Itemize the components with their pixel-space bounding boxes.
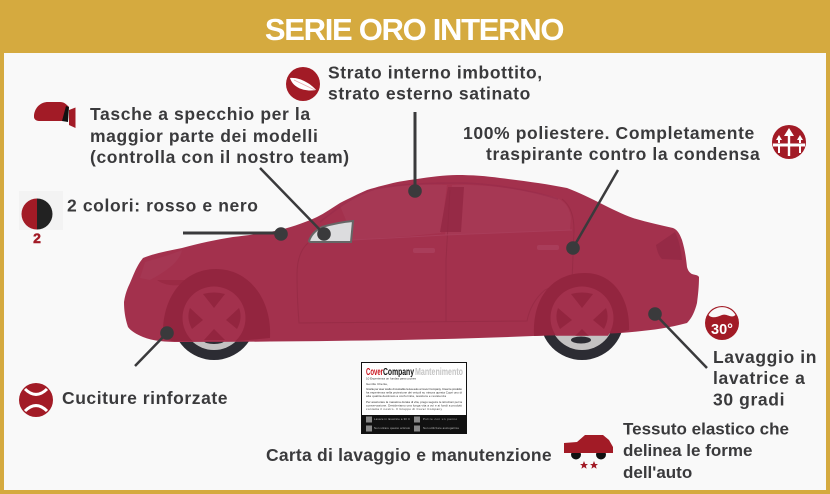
icon: two colours: 2 [33,230,41,246]
text: elastic fabric: dell'auto [623,463,692,482]
text: mirror pockets: Tasche a specchio per la [90,104,311,124]
door handles [413,248,435,253]
text: stitching: Cuciture rinforzate [62,388,228,408]
tail light [656,232,682,260]
text: machine wash: 30 gradi [713,390,785,410]
text: elastic fabric: delinea le forme [623,441,752,460]
windows [340,185,571,240]
icon: elastic car [564,435,613,469]
car body [124,175,699,342]
card heading: Mantenimento [415,367,463,378]
pointer: stitching [135,326,174,366]
card care text: Lavare in lavatrice a 30 C [374,417,410,421]
card heading: Company [383,367,414,378]
card body text: Gentile Cliente, [366,382,388,386]
pointer: polyester [566,170,618,255]
front wheel hub [182,286,246,341]
text: two colours: 2 colori: rosso e nero [67,196,259,216]
roof rail [320,183,558,222]
text: mirror pockets: maggior parte dei modelli [90,126,318,146]
front wheel arch [163,269,270,341]
rear wheel hub [550,286,614,336]
card body text: Grazie per aver scelto di custodire la tua auto a Cover Company. Crea tre prodotto [366,387,462,391]
car illustration [124,175,699,360]
text: machine wash: lavatrice a [713,368,805,388]
text: wash card: Carta di lavaggio e manutenzione [266,445,552,465]
card body text: contatta il nostro. Il Gruppo di Cover Company [366,407,442,411]
card body text: conservazione. Desideriamo una lunga vita a voi e ai fondi a prodotti [366,404,462,408]
icon: 30 degree wash [705,306,739,340]
icon: breathable arrows [772,125,806,159]
card body text [366,376,462,411]
card care text: Non stirare questo articolo [374,426,410,430]
headlight [140,250,182,280]
card care text: Pulire con un panno [423,417,457,421]
wash card [362,362,466,434]
icon: two colours [19,191,63,246]
text: polyester: traspirante contro la condensa [486,144,760,164]
rear and front tyres [172,276,624,360]
text: padded layer: Strato interno imbottito, [328,62,543,82]
title: SERIE ORO INTERNO [265,12,563,47]
icon: feather [286,67,320,101]
icon: stitching [19,383,53,417]
card body text: 10 Esperienza on fundas para coches [366,376,416,380]
icon: 30 degree wash: 30° [711,322,733,338]
side mirror window [309,221,353,242]
pointer: machine wash [648,307,707,368]
pointer: mirror pockets [260,168,331,241]
text: mirror pockets: (controlla con il nostro team) [90,147,350,167]
door seams [297,190,574,323]
card body text: alta qualita destinato a conformita, tessitura e resistenza [366,394,446,398]
pointer: two colours [183,227,288,241]
card care text: Non utilizzare asciugatrice [423,426,459,430]
header banner [0,0,830,53]
B pillar [440,187,464,232]
pointer: padded layer [408,112,422,198]
icon: mirror [34,102,76,128]
card heading: Cover [366,367,383,378]
text: polyester: 100% poliestere. Completamente [463,123,755,143]
card care icons [366,416,420,432]
rear wheel arch [534,273,629,336]
card care text [374,417,459,430]
text: elastic fabric: Tessuto elastico che [623,420,789,438]
card heading [366,367,463,378]
belt line [352,230,572,240]
card body text: ha esperienza nella protezione dei veicoli su misura questa Copri uno di [366,390,462,394]
card body text: Per assicurare la massima durata di vita, prego seguire le istruzioni per la [366,400,462,404]
text: machine wash: Lavaggio in [713,347,817,367]
text: padded layer: strato esterno satinato [328,84,531,104]
